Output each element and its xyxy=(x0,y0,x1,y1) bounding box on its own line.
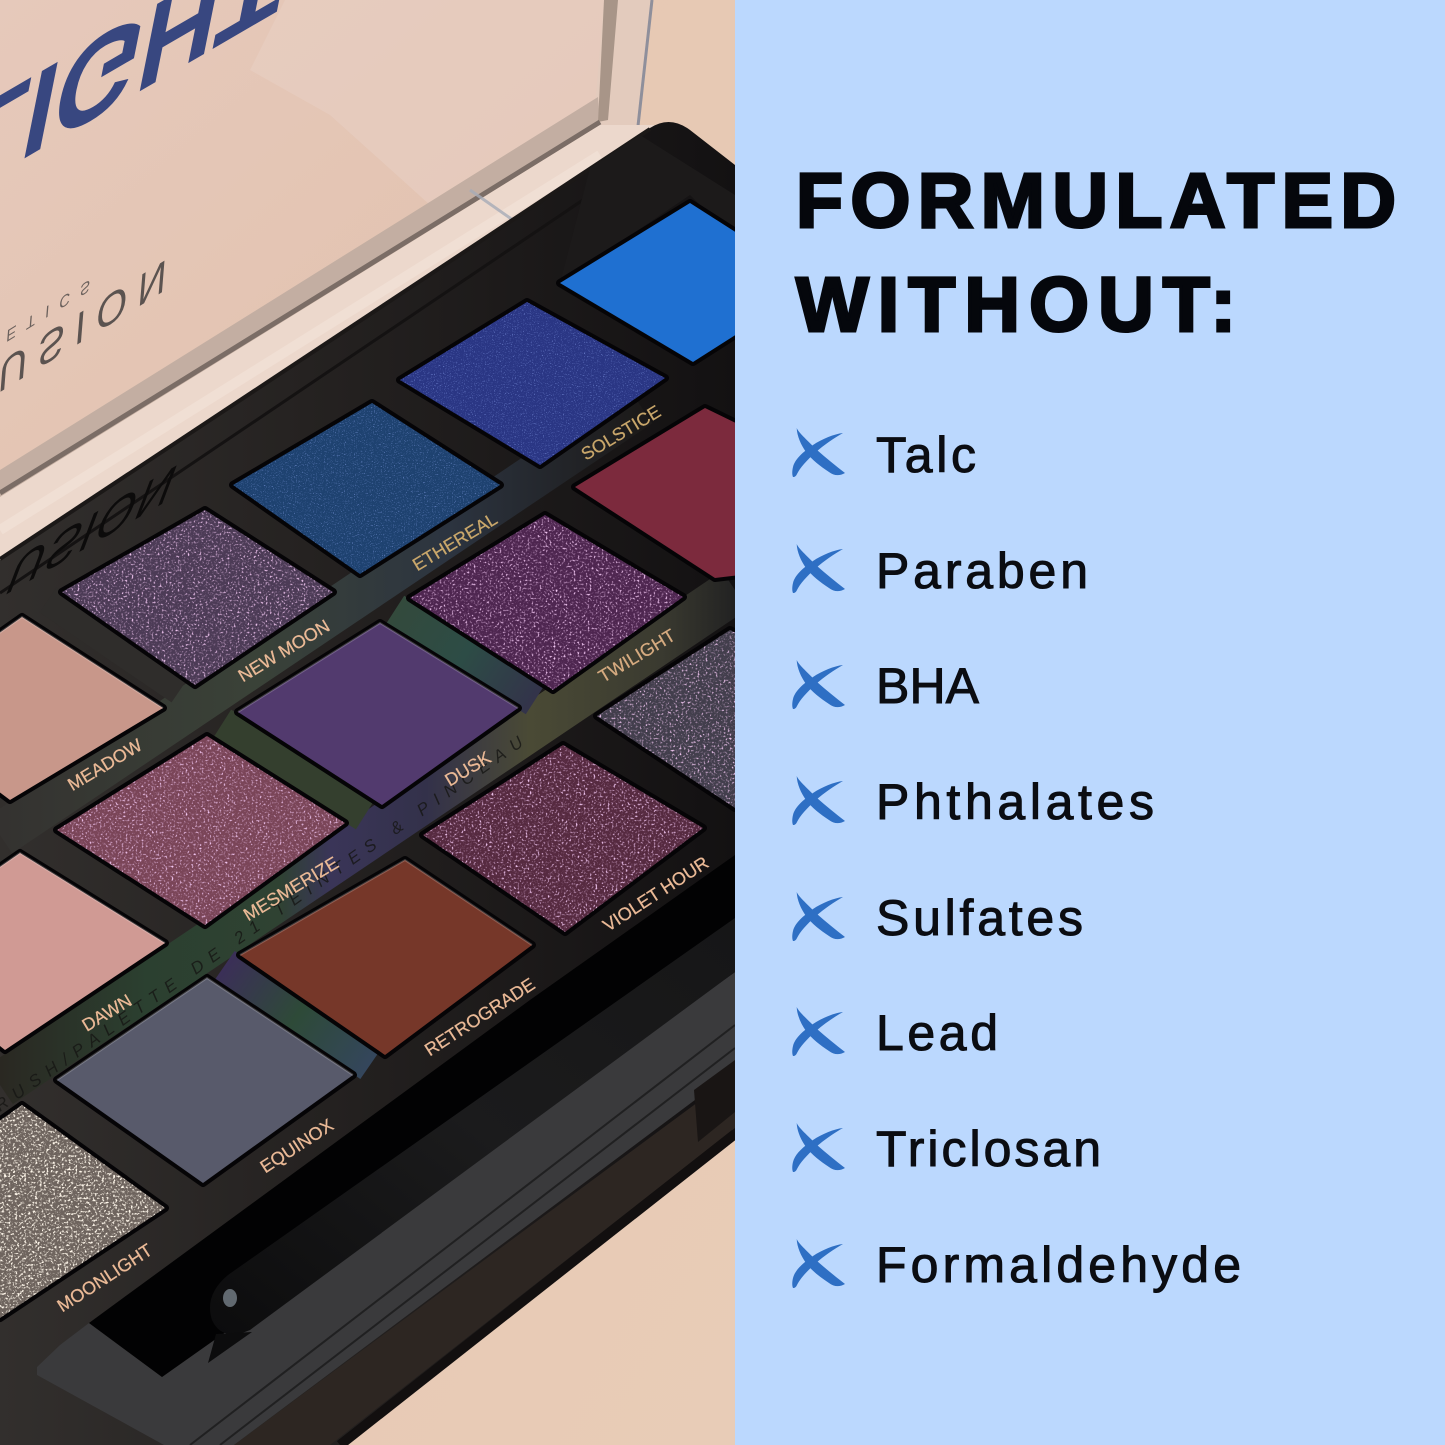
panel: formulated without list xyxy=(735,0,1445,1445)
shade: twilight xyxy=(410,515,683,690)
tray mirrored rim lettering: USION xyxy=(0,450,185,607)
shade names: RETROGRADE xyxy=(421,974,538,1060)
shade: navy glitter xyxy=(400,302,665,465)
shade names: NEW MOON xyxy=(235,616,333,686)
shade names: MESMERIZE xyxy=(240,853,342,925)
heading xyxy=(796,158,1396,348)
shade: bright blue xyxy=(560,203,740,362)
photo: eyeshadow palette xyxy=(0,0,735,1445)
shade: meadow xyxy=(0,617,163,800)
shade: purple glitter xyxy=(62,510,333,685)
grey tray lip xyxy=(37,972,735,1445)
shade names: MOONLIGHT xyxy=(54,1240,156,1316)
shade: dawn xyxy=(0,853,165,1050)
list item: Lead: Lead xyxy=(876,1005,998,1061)
tray clasp notch xyxy=(694,1060,735,1142)
list item: BHA xyxy=(792,658,980,714)
heading: FORMULATED xyxy=(796,158,1396,244)
list item: Phthalates: Phthalates xyxy=(876,774,1154,830)
brown tray side xyxy=(234,1075,735,1445)
list item: Lead xyxy=(792,1005,998,1061)
list item: Talc xyxy=(792,427,976,483)
list item: Triclosan: Triclosan xyxy=(876,1121,1101,1177)
tray outer black edge xyxy=(340,1134,735,1445)
list item: Talc: Talc xyxy=(876,427,976,483)
mirrored lid brand subtitle: ETICS xyxy=(6,275,91,346)
brush handle xyxy=(208,918,735,1363)
list item: Formaldehyde: Formaldehyde xyxy=(876,1237,1241,1293)
shade names: EQUINOX xyxy=(256,1115,337,1177)
shade: deep red xyxy=(575,408,740,578)
heading: WITHOUT: xyxy=(796,262,1236,348)
shade names: ETHEREAL xyxy=(409,509,501,575)
surface background xyxy=(0,0,735,1445)
shade: retrograde xyxy=(240,860,532,1055)
shade names: VIOLET HOUR xyxy=(599,852,712,935)
shade: mesmerize xyxy=(57,736,345,925)
tray groove lines xyxy=(190,1025,735,1445)
shade: moonlight xyxy=(0,1105,165,1318)
palette tray xyxy=(0,122,740,1445)
tray small print: RUSH/PALETTE DE 21 TEINTES & PINCEAU xyxy=(0,732,527,1115)
mirrored lid brand name: USION xyxy=(0,249,168,404)
brush compartment xyxy=(89,855,735,1377)
shade: teal shimmer xyxy=(233,403,500,574)
shade: equinox xyxy=(57,978,353,1183)
shade: dusk xyxy=(238,623,518,805)
list item: BHA: BHA xyxy=(876,658,980,714)
shade names: SOLSTICE xyxy=(578,401,664,464)
shade names: DUSK xyxy=(441,747,494,790)
list item: Sulfates: Sulfates xyxy=(876,890,1083,946)
shade names: DAWN xyxy=(78,990,135,1035)
clear lid xyxy=(0,0,660,560)
corner inset xyxy=(560,135,735,283)
holographic strips xyxy=(0,405,735,1085)
list item: Paraben: Paraben xyxy=(876,543,1088,599)
shade names: MEADOW xyxy=(64,735,146,795)
shade names xyxy=(54,401,712,1316)
shade: grey glitter xyxy=(597,630,740,808)
shade: violet hour xyxy=(423,745,703,932)
shade names: TWILIGHT xyxy=(595,625,679,687)
